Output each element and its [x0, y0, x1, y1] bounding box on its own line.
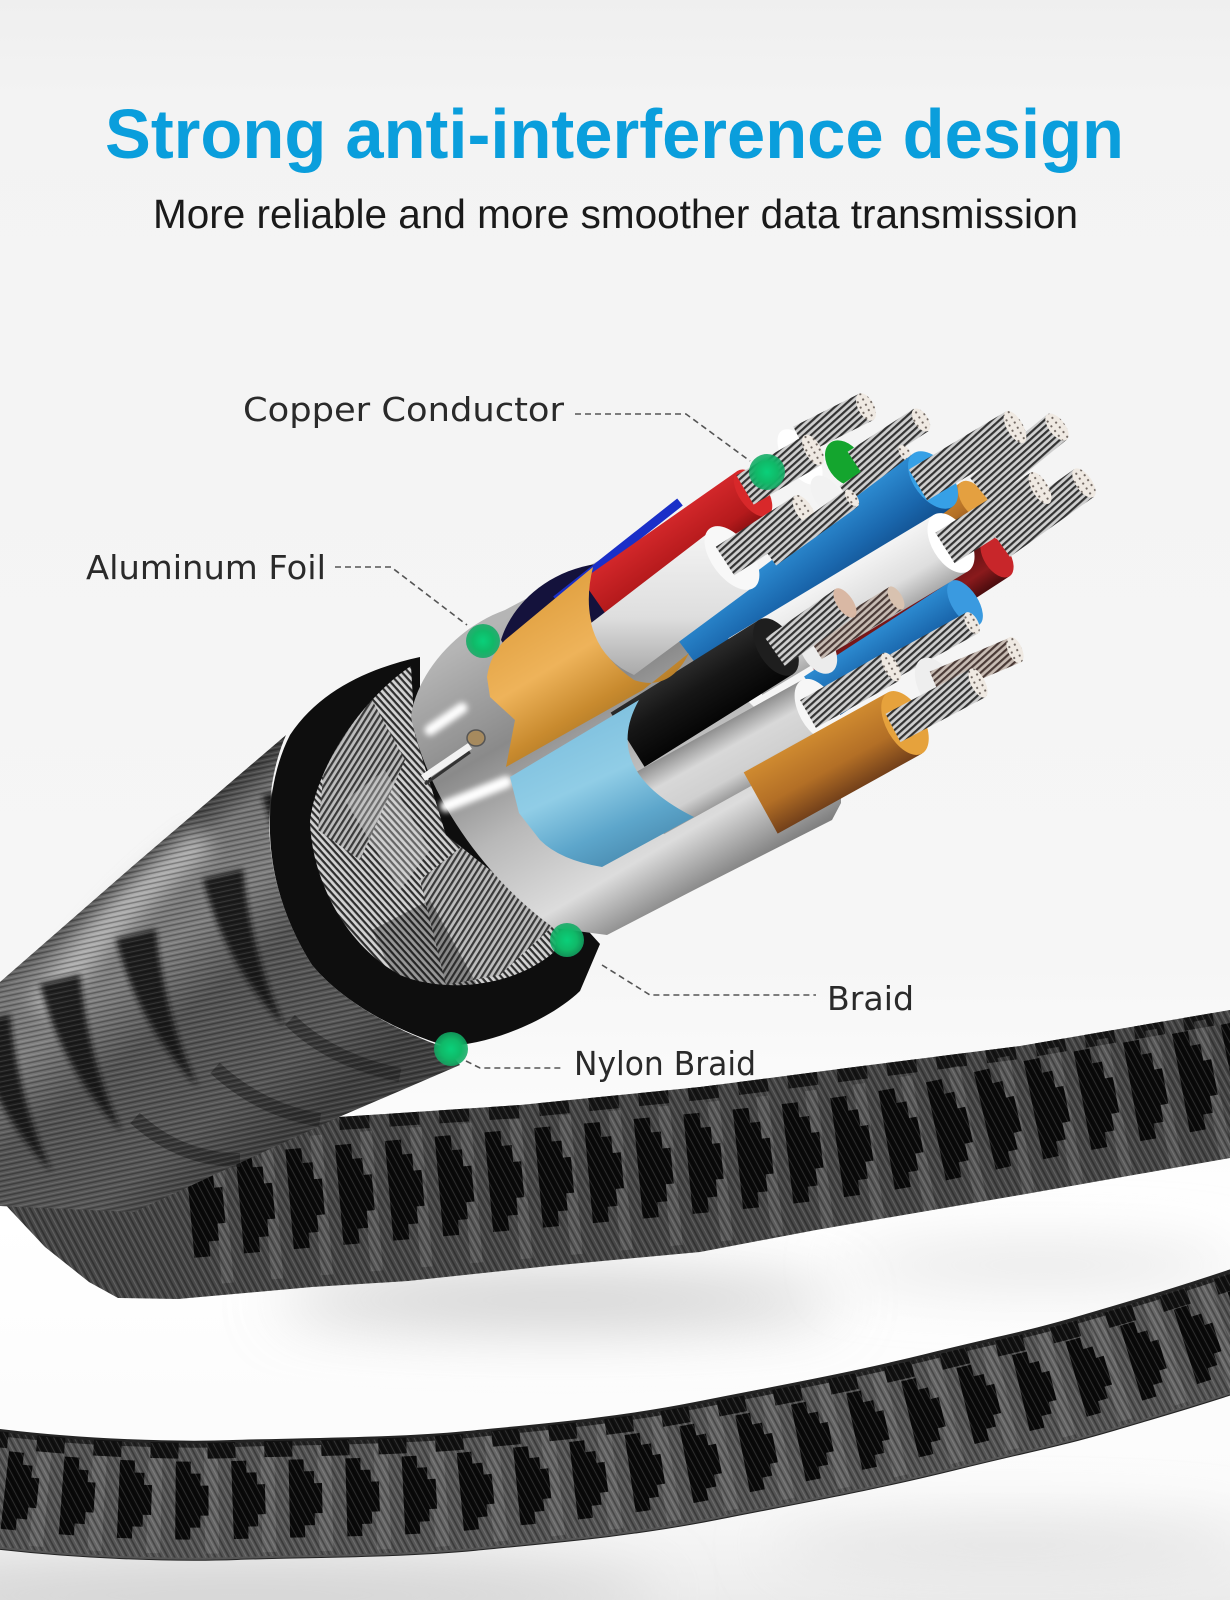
dark red tube with wire [804, 464, 1100, 693]
green tube with wire [817, 405, 934, 493]
label: braid: Braid [827, 979, 914, 1018]
marker: nylon braid [434, 1032, 468, 1066]
white main tube with wire [591, 487, 862, 675]
orange lower tube with wire [744, 666, 992, 834]
orange foil wrap [487, 567, 689, 767]
cable: middle coil section and lower left bend [0, 1000, 1230, 1310]
white tube behind orange with wire [906, 634, 1027, 724]
nylon braid black inner lining [270, 657, 600, 1046]
cable: bottom coil section [0, 1276, 1230, 1504]
grey-white tube with wire [631, 650, 905, 834]
white right tube with wire [728, 468, 1056, 695]
light blue foil wrap [510, 700, 694, 867]
nylon braid jacket [0, 735, 460, 1212]
marker: aluminum foil [466, 624, 500, 658]
aluminum foil shield [411, 560, 841, 935]
label: copper conductor: Copper Conductor [243, 390, 564, 429]
rear white tube with wire [749, 390, 880, 499]
title: Strong anti-interference design [105, 95, 1124, 173]
conductor bundle [487, 390, 1100, 867]
subtitle: More reliable and more smoother data transmission [153, 191, 1078, 237]
callout line: copper conductor [575, 414, 750, 461]
red tube with wire [582, 463, 780, 624]
callout line: aluminum foil [335, 567, 467, 625]
blue streak [556, 502, 680, 600]
orange small tube with wire [920, 409, 1073, 547]
marker: braid [550, 923, 584, 957]
navy inner core [501, 560, 620, 670]
black tube with wire [611, 584, 861, 767]
label: nylon braid: Nylon Braid [574, 1044, 756, 1083]
lower blue tube [804, 574, 990, 720]
metal braid shield [310, 666, 558, 986]
small white lower tube with wires [791, 584, 983, 681]
label: aluminum foil: Aluminum Foil [86, 548, 326, 587]
red tube wire [745, 431, 828, 490]
callout line: nylon braid [466, 1061, 561, 1068]
marker: copper conductor [749, 454, 785, 490]
small white tube with wire [804, 443, 914, 520]
blue main tube with wire [674, 407, 1031, 687]
callout line: braid [602, 965, 816, 995]
